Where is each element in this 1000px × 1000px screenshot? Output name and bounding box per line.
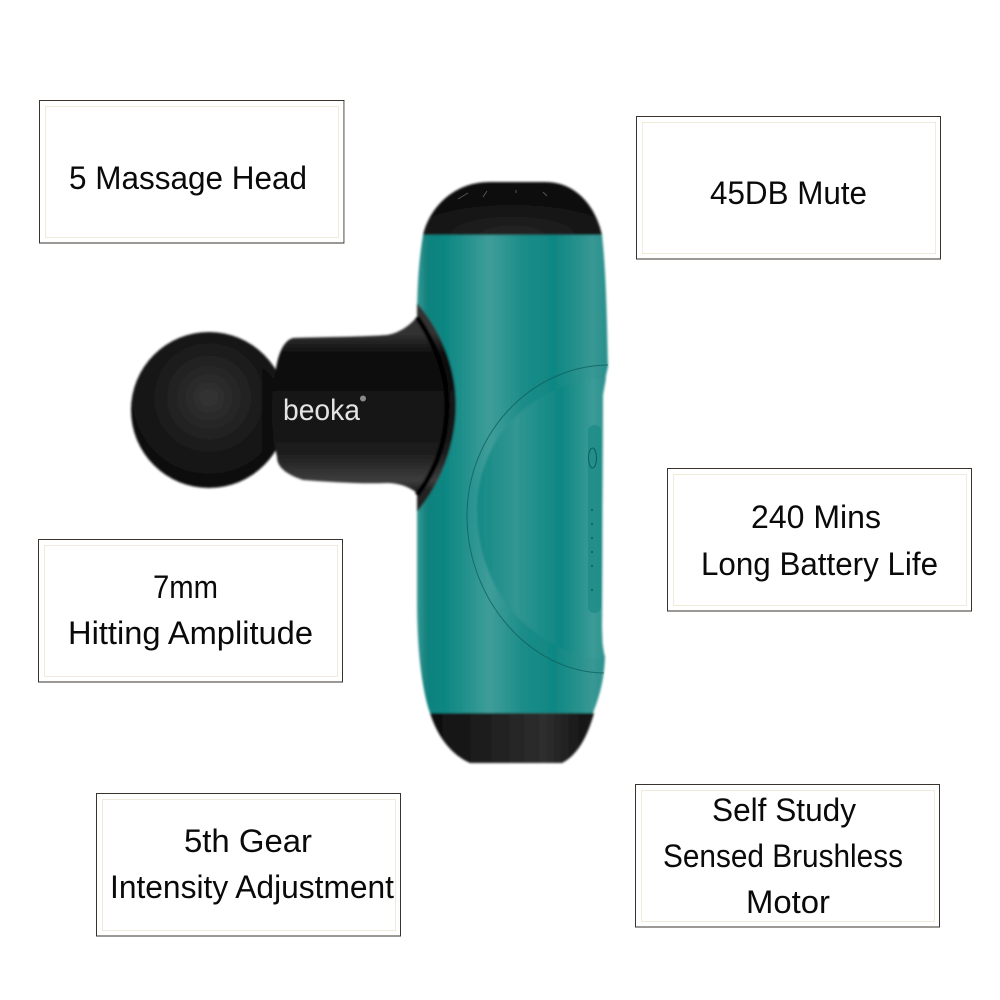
grip outline [467,365,608,673]
label: Motor: Motor [746,884,830,920]
recessed grip [477,378,606,660]
massage ball head [131,332,287,488]
brand logo: beoka [283,394,360,427]
label: 5th Gear: 5th Gear [184,823,312,859]
power icon [588,448,596,468]
bottom black cap [430,713,594,763]
panel: Self Study Sensed Brushless Motor [636,784,940,927]
label: Intensity Adjustment: Intensity Adjustment [110,869,394,905]
control strip [588,425,601,613]
label: Sensed Brushless: Sensed Brushless [663,838,903,874]
panel: 5th Gear Intensity Adjustment [96,794,400,936]
label: Self Study: Self Study [712,792,856,828]
ball connector [262,368,280,452]
label: Hitting Amplitude: Hitting Amplitude [68,615,313,651]
panel: 45DB Mute [636,116,940,259]
illustration: beoka massage gun [131,182,608,763]
black neck [272,303,456,512]
label: Long Battery Life: Long Battery Life [701,546,938,582]
label: 45DB Mute: 45DB Mute [710,175,867,211]
neck inner shading [417,317,447,495]
panel: 7mm Hitting Amplitude [38,540,342,682]
top black cap [423,182,602,235]
battery indicator dots [591,509,593,591]
registered mark [360,396,366,402]
top cap vents [458,190,547,199]
panel: 240 Mins Long Battery Life [668,468,972,611]
label: 7mm: 7mm [153,569,218,605]
label: 5 Massage Head: 5 Massage Head [69,160,307,196]
label: 240 Mins: 240 Mins [751,499,881,535]
teal body [417,235,608,713]
panel: 5 Massage Head [40,100,344,244]
